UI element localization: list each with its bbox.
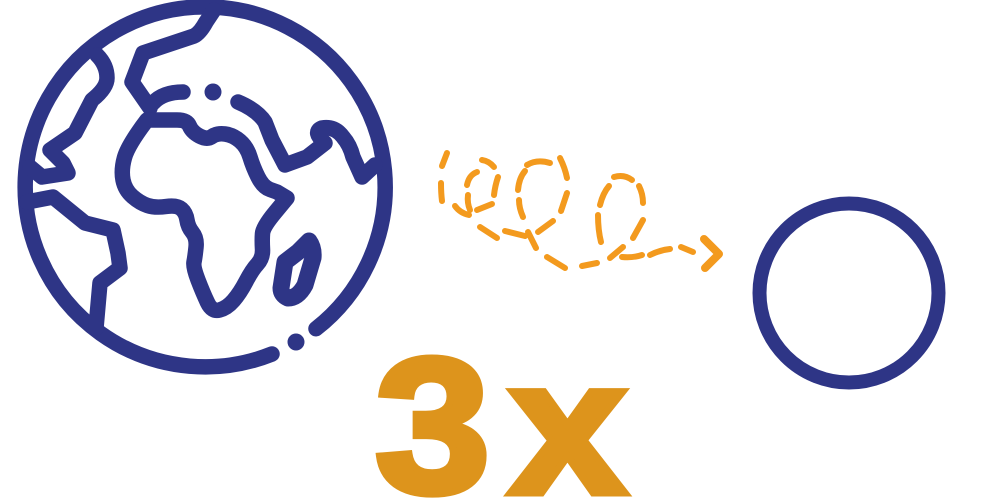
arrow: dashed looping path [441, 153, 719, 268]
Mediterranean island dot [204, 84, 222, 100]
continent: Africa [122, 120, 287, 310]
icon: small circle [760, 204, 938, 382]
globe outline [25, 7, 385, 367]
island: Madagascar [281, 241, 313, 298]
continent: Greenland and Europe coast [132, 10, 214, 108]
globe gap dot [288, 334, 304, 350]
Mediterranean coast [153, 92, 183, 103]
icon: globe [25, 7, 385, 367]
multiplier text [375, 319, 626, 500]
continent: North America [30, 55, 107, 177]
continent: South America [27, 197, 120, 328]
continent: Asia coast [238, 102, 375, 177]
